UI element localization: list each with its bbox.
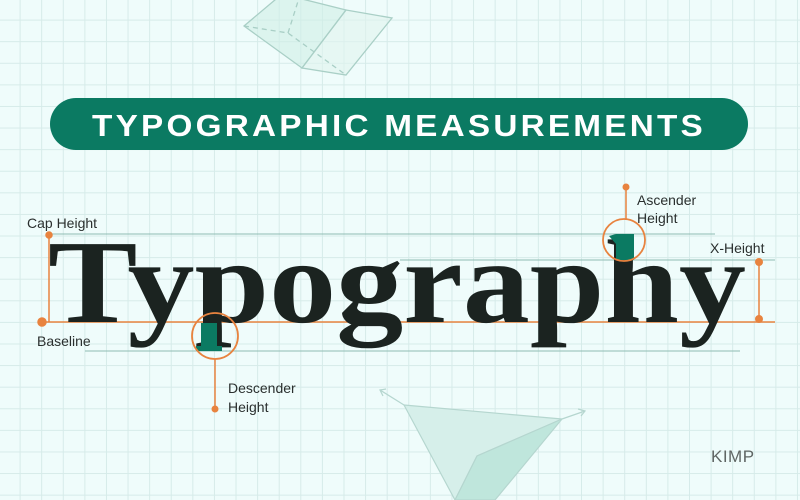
x-height marker xyxy=(756,258,762,322)
title pill xyxy=(50,98,748,150)
labels: Cap Height xyxy=(27,215,97,231)
guide lines xyxy=(50,234,775,351)
ascender highlight xyxy=(603,184,645,261)
descender highlight xyxy=(192,313,238,412)
word: Typography: Typography xyxy=(48,216,746,348)
labels: Height xyxy=(637,210,678,226)
labels: X-Height xyxy=(710,240,765,256)
icon: glass cube xyxy=(244,0,392,75)
icon: glass pyramid xyxy=(380,389,585,500)
logo: KIMP: KIMP xyxy=(711,447,755,466)
labels: Height xyxy=(228,399,269,415)
labels: Baseline xyxy=(37,333,91,349)
labels: Ascender xyxy=(637,192,696,208)
baseline xyxy=(38,232,775,326)
labels: Descender xyxy=(228,380,296,396)
title pill: TYPOGRAPHIC MEASUREMENTS xyxy=(92,108,706,143)
labels xyxy=(27,192,765,415)
